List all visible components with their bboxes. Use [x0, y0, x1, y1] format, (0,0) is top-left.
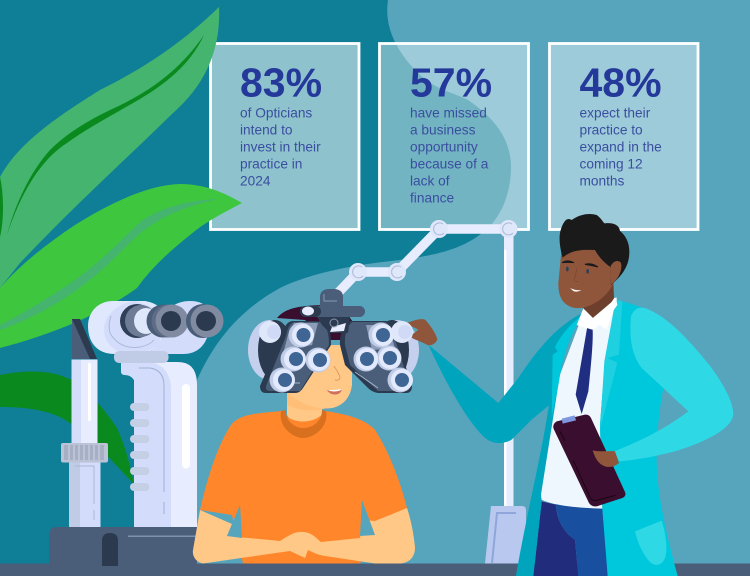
hair — [277, 305, 355, 340]
nose and mouth — [570, 268, 582, 292]
sleeve gaps — [227, 505, 242, 538]
doctor — [407, 297, 733, 576]
collar — [584, 297, 617, 330]
lenses — [270, 322, 412, 392]
right sleeve — [614, 308, 733, 461]
holding hand — [593, 450, 619, 467]
stat box 1: 83% — [240, 60, 322, 106]
white collar edge — [577, 298, 617, 330]
stat box 3: months — [580, 174, 625, 188]
stat box 1 — [210, 44, 359, 230]
left column — [72, 319, 97, 359]
mouth — [327, 389, 342, 395]
stat box 2: lack of — [410, 174, 450, 188]
stat box 2: finance — [410, 190, 454, 206]
shirt — [200, 411, 407, 564]
leaf: upper light green — [0, 7, 219, 288]
left knob — [259, 321, 281, 343]
arms — [193, 508, 415, 564]
sleeve left — [428, 312, 585, 443]
stat box 2: a business — [410, 122, 476, 138]
stat box 3: coming 12 — [580, 156, 643, 172]
lapel — [600, 300, 622, 430]
trousers — [533, 501, 578, 576]
doctor head — [558, 214, 629, 330]
phoropter — [248, 289, 419, 393]
top mount — [320, 289, 343, 310]
background blob — [197, 0, 750, 576]
patient — [193, 305, 415, 564]
stat box 3: expand in the — [580, 140, 662, 154]
reaching hand — [407, 319, 437, 345]
stat box 1: invest in their — [240, 140, 321, 154]
eyebrows and eyes — [562, 261, 598, 274]
stat box 2: 57% — [410, 60, 492, 106]
stat box 2: have missed — [410, 106, 487, 120]
stat box 1: practice in — [240, 156, 302, 172]
stat box 2: opportunity — [410, 140, 478, 154]
stat box 2 — [380, 44, 528, 230]
collar — [281, 410, 326, 438]
clipboard — [553, 415, 625, 506]
stat box 1: intend to — [240, 122, 293, 138]
face — [287, 345, 352, 409]
right column — [121, 362, 197, 527]
tie — [576, 319, 595, 414]
pocket — [635, 521, 666, 565]
stat box 3: practice to — [580, 122, 643, 138]
ear — [610, 261, 621, 284]
coat left panel — [516, 313, 584, 576]
floor — [0, 564, 750, 576]
leaf: dark green lower — [0, 372, 134, 484]
slit lamp — [49, 301, 224, 566]
right body — [340, 321, 412, 393]
optical stand arm — [335, 220, 526, 564]
leaf: bright green — [0, 184, 242, 348]
phoropter right knob — [391, 321, 413, 343]
stat box 3: 48% — [580, 60, 662, 106]
neck — [582, 282, 614, 318]
face — [558, 248, 613, 308]
stat box 1: of Opticians — [240, 106, 312, 120]
left body — [260, 321, 331, 393]
neck — [287, 385, 322, 440]
hair — [560, 214, 629, 285]
stat box 2: because of a — [410, 156, 489, 172]
stat box 3 — [550, 44, 698, 230]
stat box 1: 2024 — [240, 174, 271, 188]
binocular head — [150, 301, 211, 354]
shirt — [541, 300, 617, 509]
side discs — [248, 320, 292, 380]
stat box 3: expect their — [580, 106, 651, 120]
coat right panel — [600, 300, 678, 576]
lamp base — [49, 527, 197, 564]
